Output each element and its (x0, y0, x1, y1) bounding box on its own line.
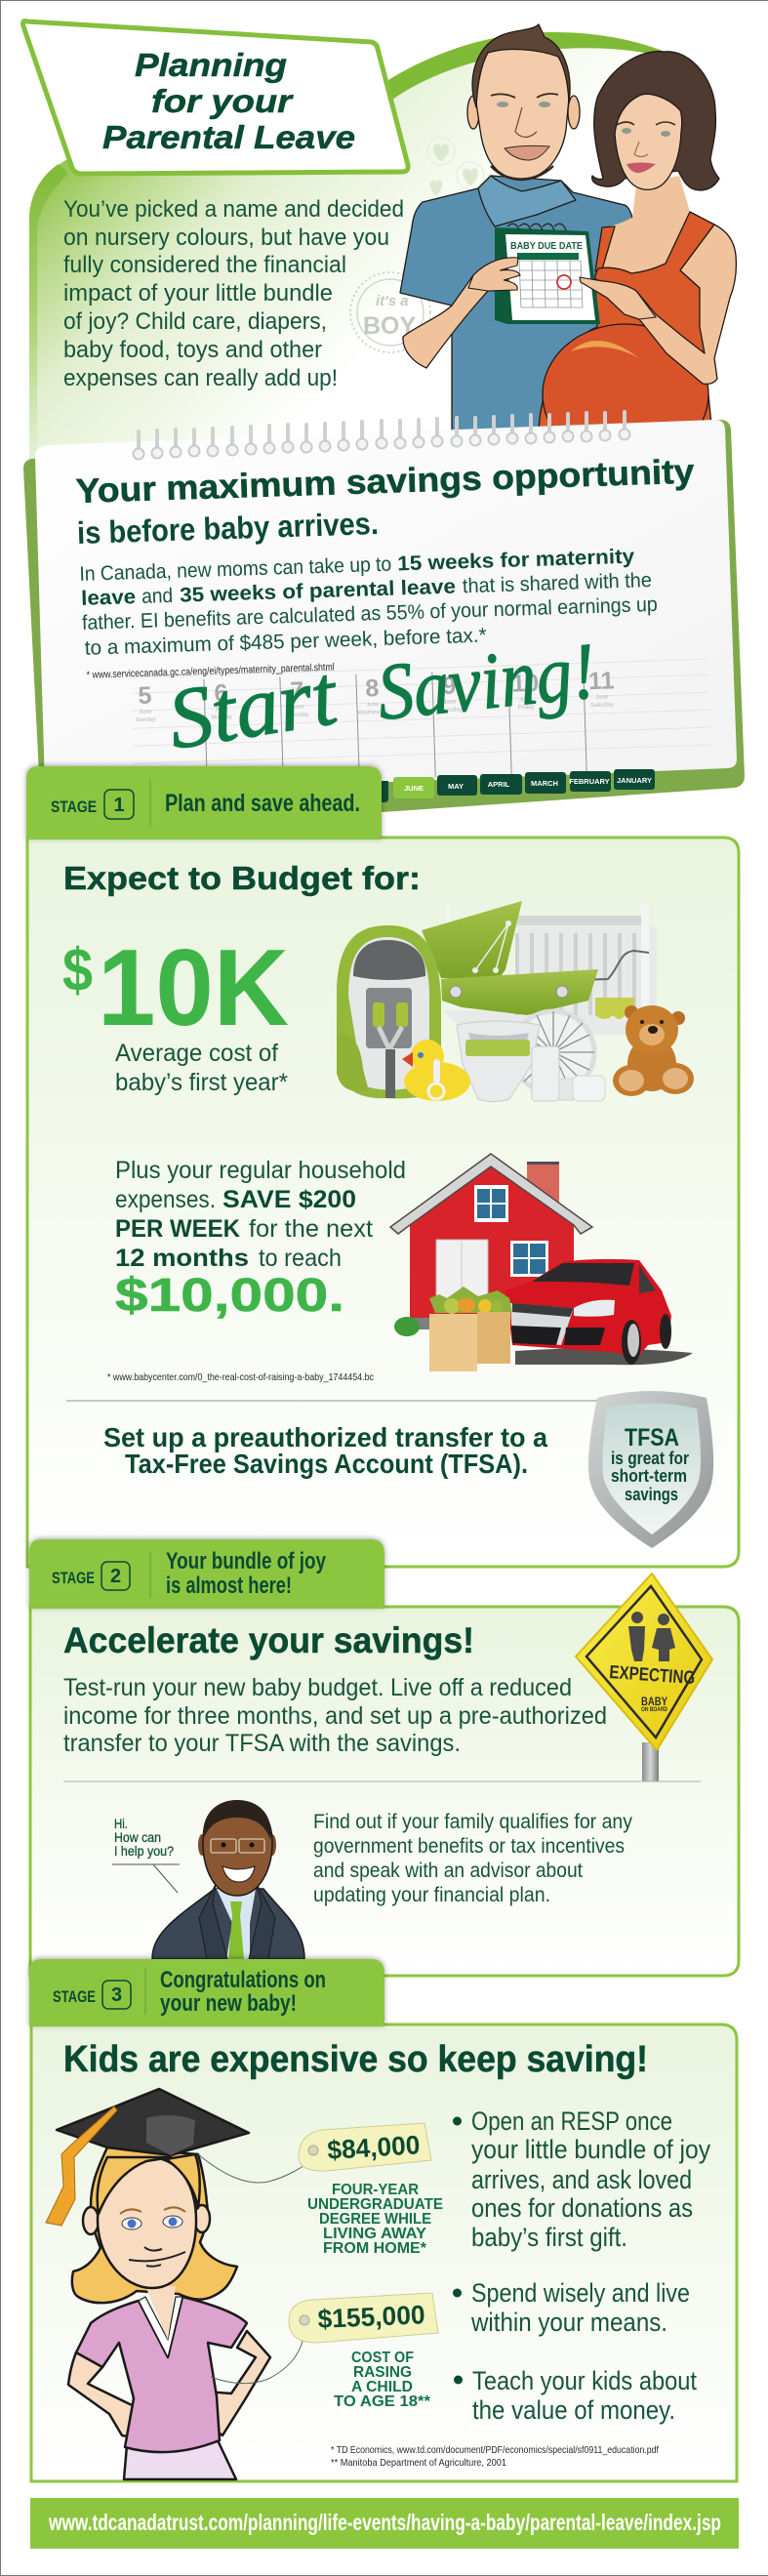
household text: SAVE $200 (222, 1186, 356, 1213)
icon: it's a boy stamp (350, 272, 430, 352)
caption: raising cost: TO AGE 18** (334, 2393, 431, 2410)
household text: 12 months (115, 1245, 249, 1272)
calendar grid: 9 (442, 673, 457, 700)
speech bubble: I help you? (114, 1843, 174, 1859)
illustration: house (390, 1154, 592, 1336)
woman (539, 52, 736, 465)
bullet list: the value of money. (472, 2395, 675, 2425)
caption: raising cost (334, 2350, 431, 2410)
TFSA callout text (103, 1422, 547, 1479)
intro paragraph: expenses can really add up! (63, 365, 338, 391)
stage 3 tab (29, 1959, 384, 2026)
heading: Your maximum savings opportunity (75, 453, 695, 511)
stage 2 tab: is almost here! (166, 1573, 292, 1599)
caption: degree cost: UNDERGRADUATE (307, 2196, 443, 2213)
heading: Expect to Budget for: (63, 860, 421, 896)
caption: degree cost: FOUR-YEAR (332, 2182, 419, 2198)
stage 2 tab (29, 1539, 384, 1609)
footnote: * www.babycenter.com/0_the-real-cost-of-raising-a-baby_1744454.bc (107, 1371, 374, 1383)
calendar grid: 10 (511, 670, 540, 698)
body text: transfer to your TFSA with the savings. (63, 1730, 461, 1757)
big number: $10K: 10K (98, 927, 289, 1048)
teddy bear (613, 1005, 694, 1096)
heading: Accelerate your savings! (63, 1620, 474, 1660)
month tabs: JUNE (404, 784, 424, 793)
body text: leave (81, 586, 137, 610)
calendar grid: Saturday (590, 702, 614, 709)
body text: to a maximum of $485 per week, before tax.* (84, 624, 487, 660)
stage 3 tab: STAGE (53, 1987, 96, 2006)
notebook back cover (23, 420, 745, 812)
icon: TFSA shield (588, 1391, 713, 1548)
car seat (337, 925, 441, 1098)
intro paragraph: impact of your little bundle (63, 280, 333, 307)
TFSA callout text: Set up a preauthorized transfer to a (103, 1422, 547, 1452)
body text: father. EI benefits are calculated as 55% of your normal earnings up (82, 593, 658, 634)
icon: expecting road sign (576, 1574, 712, 1781)
handwritten: Start Saving!: Start (162, 648, 345, 768)
illustration: graduate girl (46, 2089, 270, 2479)
handwritten: Start Saving!: Saving! (373, 626, 600, 737)
title banner: for your (151, 83, 294, 119)
caption: degree cost: LIVING AWAY (323, 2226, 426, 2242)
intro paragraph: of joy? Child care, diapers, (63, 308, 327, 335)
crib (442, 905, 657, 1049)
stage 1 tab: Plan and save ahead. (165, 790, 360, 817)
body text (63, 1674, 607, 1757)
stage 2 tab: Your bundle of joy (166, 1548, 327, 1574)
girl's face (120, 2207, 185, 2267)
price tag strings (198, 2154, 318, 2384)
handwritten: Start Saving! (162, 626, 600, 768)
spiral binding (133, 412, 630, 459)
calendar grid: Wednesday (357, 710, 388, 716)
body text: and (141, 585, 174, 608)
bullet list (453, 2106, 710, 2425)
stroller (422, 901, 649, 1093)
bullet list: your little bundle of joy (471, 2135, 710, 2164)
illustration: advisor (152, 1800, 304, 1959)
icon: TFSA shield: is great for (611, 1449, 689, 1468)
baby bottle (532, 1046, 605, 1101)
intro paragraph: You’ve picked a name and decided (63, 196, 404, 223)
bullet list: Teach your kids about (472, 2366, 697, 2395)
advisor text: updating your financial plan. (313, 1884, 550, 1906)
household text (115, 1157, 406, 1272)
illustration: expecting couple (400, 24, 736, 465)
big number: $10K: $ (62, 937, 93, 1004)
intro paragraph: fully considered the financial (63, 252, 346, 278)
footnotes: ** Manitoba Department of Agriculture, 2001 (331, 2457, 506, 2469)
household text: for the next (249, 1215, 373, 1243)
calendar grid: 8 (365, 675, 380, 703)
advisor text: government benefits or tax incentives (313, 1835, 625, 1858)
footnote: * www.servicecanada.gc.ca/eng/ei/types/maternity_parental.shtml (87, 662, 335, 681)
icon: TFSA shield: savings (625, 1485, 678, 1504)
stage 3 tab: 3 (111, 1984, 122, 2006)
calendar grid: 6 (214, 679, 228, 708)
month tabs (342, 769, 655, 802)
bullet list: Open an RESP once (471, 2106, 672, 2136)
TFSA callout text: Tax-Free Savings Account (TFSA). (125, 1449, 528, 1479)
calendar grid: June (366, 702, 380, 709)
body text: that is shared with the (463, 569, 652, 597)
calendar grid: June (519, 697, 533, 703)
price tag: $84,000 (299, 2123, 431, 2171)
intro paragraph: on nursery colours, but have you (63, 225, 389, 251)
calendar grid: Friday (518, 705, 534, 711)
bullet list: arrives, and ask loved (471, 2165, 692, 2194)
stage 1 tab: 1 (113, 795, 125, 816)
month tabs: MAY (448, 782, 464, 791)
calendar grid: 11 (588, 667, 615, 695)
title banner (23, 21, 408, 174)
body text: 15 weeks for maternity (397, 546, 635, 575)
illustration: baby gear (337, 901, 694, 1101)
title banner: Parental Leave (102, 119, 355, 155)
calendar grid: June (215, 707, 228, 714)
price tag: $155,000 (289, 2293, 438, 2343)
month tabs: APRIL (488, 780, 510, 789)
intro paragraph: baby food, toys and other (63, 337, 322, 363)
calendar grid: Tuesday (287, 712, 309, 718)
body text (79, 545, 659, 660)
body text: Test-run your new baby budget. Live off a reduced (63, 1674, 572, 1701)
stage 2 tab: 2 (110, 1566, 121, 1587)
calendar grid (131, 659, 711, 787)
body text: In Canada, new moms can take up to (79, 553, 392, 586)
speech bubble: How can (114, 1829, 161, 1845)
speech bubble (112, 1816, 180, 1893)
calendar grid: Monday (211, 715, 232, 721)
caption: raising cost: A CHILD (351, 2379, 413, 2395)
speech bubble: Hi. (114, 1816, 128, 1831)
month tabs: JANUARY (617, 776, 652, 785)
rubber duck (402, 1040, 470, 1101)
illustration: grocery bag (429, 1287, 512, 1371)
month tabs: FEBRUARY (569, 777, 610, 786)
calendar (495, 224, 600, 324)
diaper (457, 1021, 540, 1101)
man (400, 24, 632, 434)
household text: PER WEEK (115, 1215, 240, 1243)
panel: stage 2 (29, 1539, 739, 1976)
icon: it's a boy stamp: BOY (363, 312, 416, 340)
icon: expecting road sign: ON BOARD (641, 1707, 668, 1713)
stage 1 tab: STAGE (51, 797, 97, 816)
panel: stage 1 (26, 766, 739, 1567)
stage 1 tab (26, 766, 382, 839)
panel: savings notebook page (35, 420, 737, 796)
caption: Average cost of (115, 1040, 278, 1067)
icon: TFSA shield: short-term (611, 1466, 687, 1486)
calendar grid: June (139, 710, 152, 716)
icon: faint hearts (427, 138, 484, 195)
caption: raising cost: RASING (353, 2364, 412, 2381)
bullet list: ones for donations as (471, 2193, 693, 2223)
calendar grid: Thursday (437, 707, 463, 714)
stage 3 tab: Congratulations on (160, 1967, 326, 1993)
advisor text: Find out if your family qualifies for any (313, 1811, 632, 1833)
url footer bar (30, 2498, 739, 2549)
body text: 35 weeks of parental leave (180, 575, 456, 607)
body text: income for three months, and set up a pre-authorized (63, 1702, 607, 1730)
heading: Kids are expensive so keep saving! (63, 2039, 648, 2080)
caption (115, 1040, 288, 1096)
intro paragraph (63, 196, 404, 391)
calendar grid: 5 (138, 682, 152, 710)
title banner: Planning (135, 47, 287, 83)
calendar: BABY DUE DATE (510, 241, 583, 252)
footnotes: * TD Economics, www.td.com/document/PDF/economics/special/sf0911_education.pdf (331, 2444, 659, 2456)
stage 3 tab: your new baby! (160, 1990, 297, 2017)
icon: TFSA shield: TFSA (625, 1424, 679, 1452)
calendar grid: Sunday (136, 716, 156, 723)
big number: $10,000.: $10,000. (115, 1270, 344, 1322)
calendar grid: June (443, 700, 457, 706)
month tabs: MARCH (531, 779, 558, 788)
bullet list: baby’s first gift. (471, 2223, 627, 2252)
caption: degree cost: DEGREE WHILE (319, 2211, 431, 2228)
price tag: $155,000: $155,000 (317, 2300, 425, 2334)
caption: baby’s first year* (115, 1069, 288, 1096)
price tag: $84,000: $84,000 (327, 2130, 421, 2165)
household text: expenses. (115, 1186, 216, 1213)
advisor text: and speak with an advisor about (313, 1860, 583, 1882)
icon: it's a boy stamp: it's a (376, 293, 409, 309)
caption: raising cost: COST OF (351, 2350, 414, 2366)
advisor text (313, 1811, 632, 1906)
bullet list: within your means. (470, 2308, 667, 2337)
caption: degree cost (307, 2182, 443, 2257)
illustration: red car (505, 1259, 693, 1365)
header background arch (29, 31, 768, 459)
icon: expecting road sign: EXPECTING (609, 1662, 696, 1689)
caption: degree cost: FROM HOME* (323, 2240, 427, 2257)
household text: to reach (259, 1245, 342, 1272)
footnotes (331, 2444, 659, 2469)
household text: Plus your regular household (115, 1157, 406, 1184)
calendar grid: June (291, 705, 304, 711)
subheading: is before baby arrives. (76, 506, 379, 551)
calendar grid: June (595, 694, 609, 701)
calendar grid: 7 (290, 677, 304, 705)
icon: expecting road sign: BABY (641, 1695, 667, 1708)
bullet list: Spend wisely and live (471, 2278, 690, 2308)
stage 2 tab: STAGE (52, 1569, 95, 1587)
panel: stage 3 (29, 1959, 737, 2481)
